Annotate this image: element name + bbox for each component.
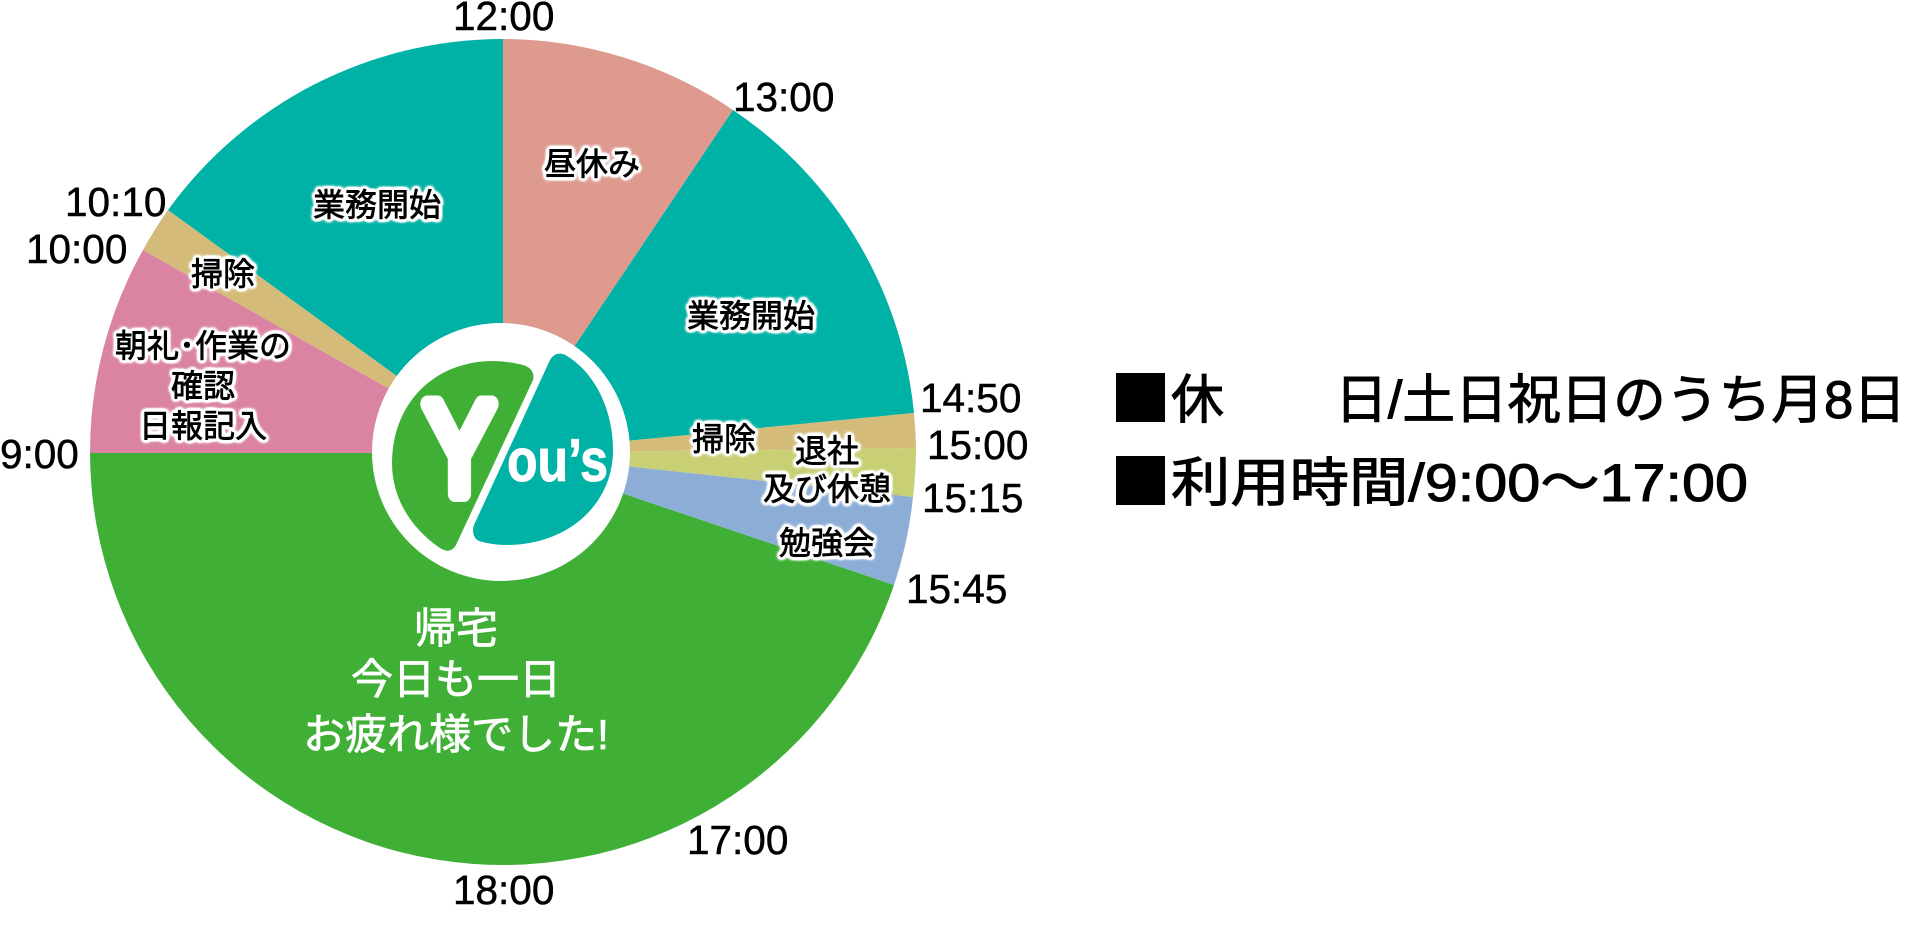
slice labels: 確認 (171, 368, 235, 404)
logo letter Y: Y (425, 375, 494, 521)
time labels (0, 0, 1028, 913)
slice labels: 勉強会 (779, 525, 875, 561)
time labels: 15:00 (927, 422, 1028, 468)
hours line: 利用時間/9:00～17:00 (1171, 454, 1748, 513)
time labels: 17:00 (687, 817, 788, 863)
time labels: 9:00 (0, 431, 79, 477)
slice labels: 掃除 (692, 421, 756, 457)
time labels: 18:00 (453, 867, 554, 913)
slice: lunch 12:00-13:00 (503, 39, 733, 453)
going home message: 帰宅 (414, 605, 498, 652)
slice labels: 及び休憩 (763, 471, 891, 507)
slice labels: 掃除 (191, 256, 255, 292)
logo green half (392, 361, 533, 551)
slice labels: 日報記入 (139, 408, 267, 444)
slice labels: 退社 (795, 433, 859, 469)
time labels: 10:00 (26, 226, 127, 272)
time labels: 15:15 (922, 475, 1023, 521)
time labels: 10:10 (65, 179, 166, 225)
time labels: 15:45 (906, 566, 1007, 612)
time labels: 14:50 (920, 375, 1021, 421)
slice: 18:00 to 9:00 and 15:45 to 18:00 going home (90, 453, 894, 865)
holidays line: 休 (1171, 371, 1224, 430)
pie chart: daily schedule (90, 39, 916, 865)
slice: work start 10:10-12:00 (168, 39, 503, 453)
time labels: 13:00 (733, 74, 834, 120)
slice: leaving and break 15:00-15:15 (503, 448, 916, 497)
slice: cleaning 14:50-15:00 (503, 413, 916, 453)
going home message: 今日も一日 (351, 656, 561, 703)
slice labels: 業務開始 (313, 187, 441, 223)
going home message: お疲れ様でした! (303, 711, 609, 758)
holidays line: 日/土日祝日のうち月8日 (1335, 371, 1906, 430)
slice labels (115, 146, 891, 561)
logo teal half (473, 354, 613, 545)
slice: morning meeting 9:00-10:00 (90, 250, 503, 453)
info text (1116, 371, 1906, 513)
slice labels: 業務開始 (687, 298, 815, 334)
logo letters ou's: ou’s (507, 427, 608, 494)
slice: study session 15:15-15:45 (503, 453, 913, 585)
slice: cleaning 10:00-10:10 (143, 210, 503, 453)
slice: work start 13:00-14:50 (503, 110, 914, 453)
logo ring (372, 323, 630, 581)
slice labels: 朝礼･作業の (115, 328, 291, 364)
slice labels: 昼休み (544, 146, 640, 182)
logo: You's (372, 323, 630, 581)
going home message (303, 605, 609, 758)
